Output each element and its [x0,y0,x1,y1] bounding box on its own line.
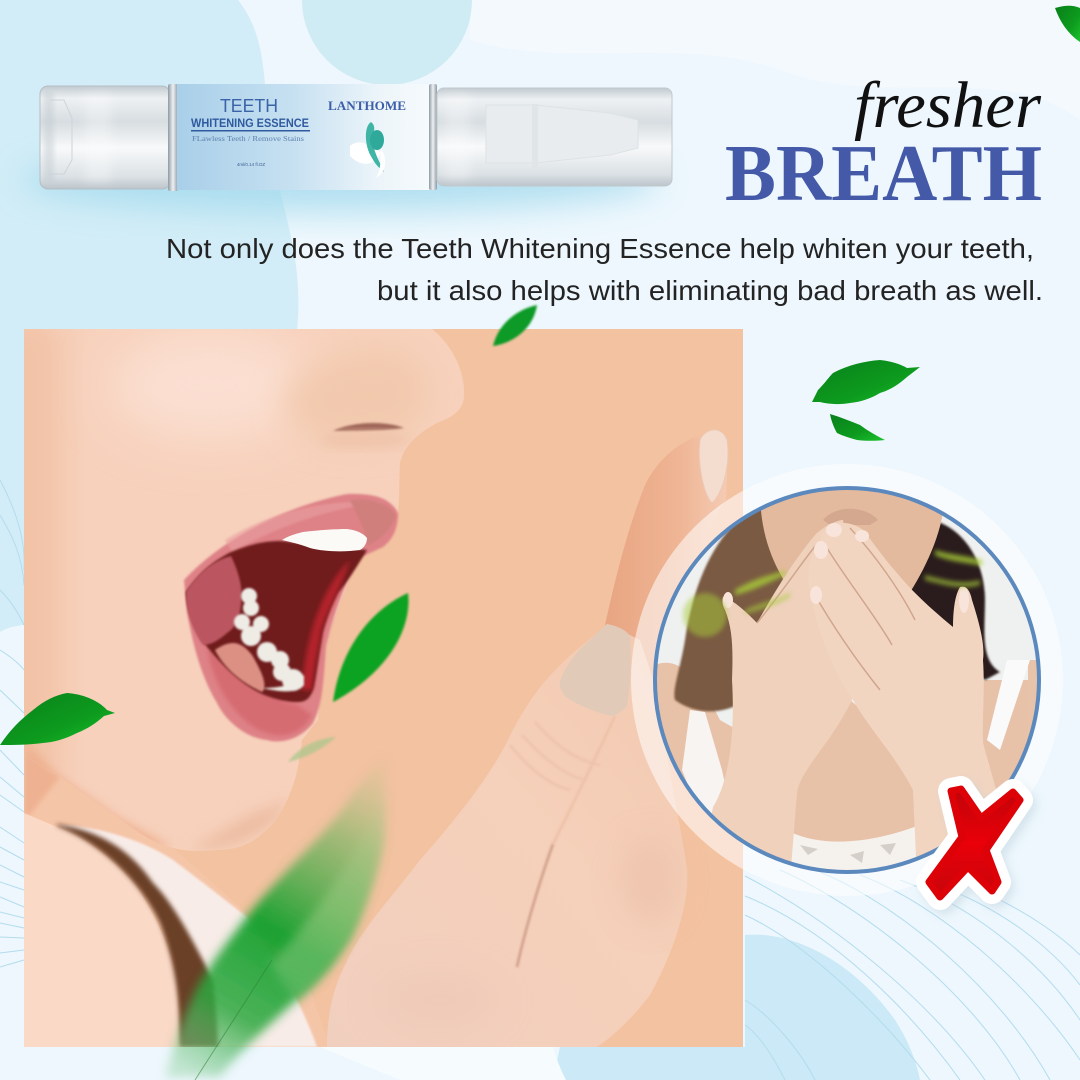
hand body [327,624,687,1047]
knuckle wrinkles [511,724,589,790]
face shading [0,320,427,850]
odor wisps [683,550,982,637]
left hand [712,520,852,862]
brand name: LANTHOME [328,98,406,113]
body text: Not only does the Teeth Whitening Essence help whiten your teeth, [166,233,1034,264]
product glow [20,148,660,212]
hair right [912,522,1001,682]
panel: woman breathing into her hand [0,320,743,1047]
neck [24,755,330,1047]
thumb nail [560,624,631,716]
index finger [605,437,728,690]
X white border [929,789,1020,897]
collar [24,813,317,1047]
circle photo [650,480,1050,880]
fingernails [723,523,969,613]
collar shadow [57,824,218,1047]
icon: red X [929,789,1024,902]
mouth cavity [186,541,367,702]
label volume: 4ml/0.14 fl.OZ [237,162,265,167]
left strap lace [682,710,724,814]
circle halo [631,464,1063,896]
face [761,490,942,590]
left cap [40,86,170,189]
hand [327,430,728,1047]
leaf: top right [1055,6,1080,42]
X red fill [929,789,1020,897]
brand logo [350,122,385,178]
headline: BREATH: BREATH [725,130,1042,218]
lower teeth [234,588,304,691]
circle border [655,488,1039,872]
shoulder [24,813,180,1047]
leaf: large blurred [166,755,386,1080]
right strap [987,660,1030,750]
right hand [808,523,1000,880]
right ring [429,84,437,190]
leaf: faint small [288,737,336,762]
label heading: TEETH [220,96,278,116]
leaf: upper right large [812,360,920,404]
hand shading [636,859,664,901]
callout: covering mouth circle [631,464,1063,896]
thumb crease [517,844,553,967]
leaf: beside mouth [333,593,408,702]
leaf: over panel top [493,305,537,346]
headline: fresher: fresher [854,69,1041,142]
background wave lines [0,480,1080,1080]
leaf rib [195,960,272,1080]
upper teeth [282,529,367,551]
mouth [184,494,398,741]
product: teeth whitening essence tube [20,84,672,212]
body text [166,233,1043,306]
face [0,320,474,859]
label tagline: FLawless Teeth / Remove Stains [192,134,304,143]
under-nose shadow [334,427,400,446]
hair left [674,505,790,711]
nostril [333,423,404,431]
nose shadow [823,509,878,525]
leaf: upper right small [830,414,885,441]
gum [215,643,264,692]
cavity red edge [302,560,350,690]
lips [184,494,398,741]
right clear cap [437,88,672,186]
nose wing [280,354,422,435]
left ring [168,84,178,191]
label [177,84,431,190]
body text: but it also helps with eliminating bad breath as well. [377,275,1043,306]
label subheading: WHITENING ESSENCE [191,116,309,130]
tongue [186,556,242,645]
leaf: on left edge [0,693,115,745]
index finger nail [699,430,728,503]
finger separations [757,528,915,690]
X shadow [933,794,1024,902]
chest and shoulders [657,662,1028,842]
bra lace [792,827,916,870]
neck side shade [24,756,59,815]
